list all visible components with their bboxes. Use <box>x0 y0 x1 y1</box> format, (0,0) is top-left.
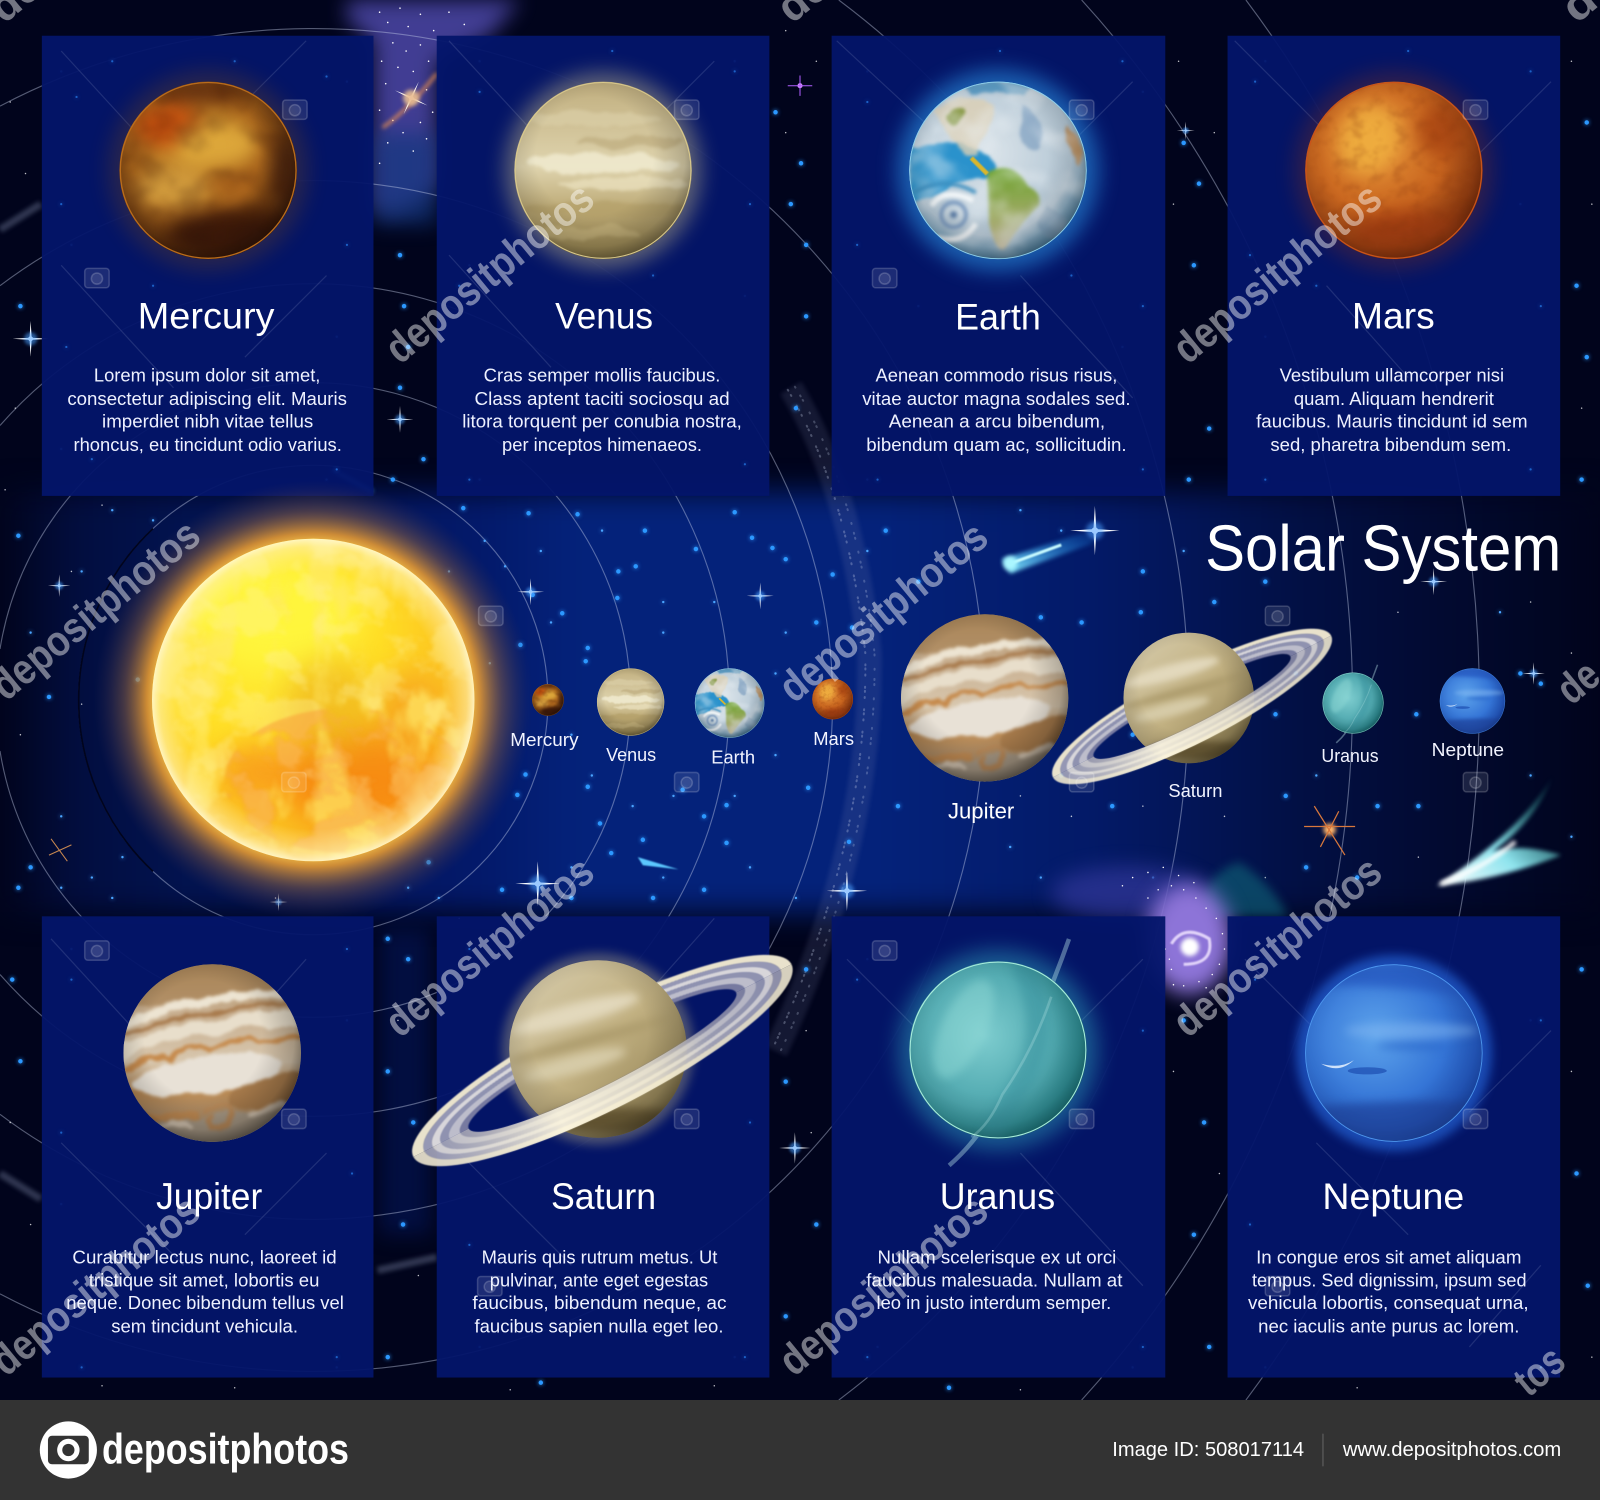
panel: Mercury background <box>42 36 373 496</box>
text: Earth description <box>862 365 1131 455</box>
text: Saturn description <box>472 1246 727 1337</box>
text: Uranus description: leo in justo interdum semper. <box>877 1292 1111 1313</box>
panel: Mars background <box>1228 36 1560 496</box>
text: Jupiter description: neque. Donec bibendum tellus vel <box>66 1292 344 1313</box>
text: Neptune description: tempus. Sed dignissim, ipsum sed <box>1252 1270 1527 1291</box>
heading: Uranus: Uranus <box>940 1176 1055 1217</box>
panel: Venus background <box>437 36 769 496</box>
watermark camera icons <box>85 100 1488 1296</box>
panel: Neptune background <box>1228 916 1560 1378</box>
text: Venus description: per inceptos himenaeos. <box>502 434 702 455</box>
text: Neptune description: In congue eros sit amet aliquam <box>1256 1246 1521 1267</box>
title: Solar System <box>1205 511 1561 584</box>
icon: small Uranus <box>1322 665 1384 743</box>
comets <box>332 469 1561 886</box>
text: Saturn description: faucibus sapien nulla eget leo. <box>474 1316 723 1337</box>
nebula: top <box>347 0 520 224</box>
watermarks: depositphotos <box>770 1186 997 1385</box>
planet glows <box>108 69 1493 1151</box>
text: Jupiter description: Curabitur lectus nunc, laoreet id <box>72 1246 337 1267</box>
text: Neptune description <box>1248 1246 1529 1337</box>
text: Jupiter description <box>66 1246 344 1337</box>
footer logo <box>40 1421 349 1479</box>
text: Jupiter description: tristique sit amet, lobortis eu <box>89 1270 319 1291</box>
watermarks: depositphotos <box>376 174 603 373</box>
text: Mercury description: consectetur adipiscing elit. Mauris <box>67 388 347 409</box>
panel: Uranus background <box>832 916 1165 1378</box>
text: Neptune description: nec iaculis ante purus ac lorem. <box>1258 1316 1519 1337</box>
label: Mars: Mars <box>813 728 854 749</box>
icon: small Mercury <box>532 683 564 716</box>
watermarks: depositphotos <box>1164 847 1391 1046</box>
text: Jupiter description: sem tincidunt vehicula. <box>111 1316 298 1337</box>
footer logo: depositphotos <box>102 1425 349 1473</box>
heading: Neptune: Neptune <box>1322 1176 1464 1217</box>
heading: Mars: Mars <box>1352 296 1435 337</box>
panel: Earth background <box>832 36 1165 496</box>
dark left orbit arcs <box>79 529 153 871</box>
text: Mars description <box>1256 365 1528 455</box>
text: Venus description: Class aptent taciti sociosqu ad <box>474 388 730 409</box>
watermarks: depositphotos <box>1164 174 1391 373</box>
dust band <box>0 204 875 1270</box>
icon: small Earth <box>695 668 764 738</box>
text: Venus description: litora torquent per conubia nostra, <box>462 411 742 432</box>
nebula: galaxy <box>1051 862 1288 994</box>
label: Earth: Earth <box>711 746 755 767</box>
icon: Uranus planet <box>909 939 1087 1165</box>
text: Earth description: bibendum quam ac, sollicitudin. <box>866 434 1127 455</box>
icon: Neptune planet <box>1305 964 1483 1142</box>
text: Saturn description: faucibus, bibendum neque, ac <box>472 1292 727 1313</box>
icon: small Mars <box>812 679 853 719</box>
icon: Sun <box>94 481 533 919</box>
heading: Earth: Earth <box>955 297 1041 338</box>
label: Neptune: Neptune <box>1432 739 1504 760</box>
icon: small Neptune <box>1440 668 1505 734</box>
text: Venus description: Cras semper mollis faucibus. <box>484 365 720 386</box>
footer image id: Image ID: 508017114 <box>1112 1439 1304 1461</box>
icon: small Saturn <box>1037 604 1347 809</box>
icon: Jupiter planet <box>96 952 330 1163</box>
footer url: www.depositphotos.com <box>1342 1439 1561 1461</box>
text: Mercury description: Lorem ipsum dolor sit amet, <box>94 365 320 386</box>
text: Saturn description: pulvinar, ante eget egestas <box>490 1270 708 1291</box>
watermarks: depositphotos <box>376 847 603 1046</box>
footer divider <box>1322 1434 1323 1466</box>
text: Earth description: vitae auctor magna sodales sed. <box>862 388 1131 409</box>
text: Mars description: Vestibulum ullamcorper nisi <box>1280 365 1504 386</box>
text: Earth description: Aenean commodo risus risus, <box>876 365 1117 386</box>
footer bar <box>0 1400 1600 1500</box>
label: Jupiter: Jupiter <box>948 798 1015 823</box>
watermarks: depositphotos <box>770 512 997 712</box>
text: Neptune description: vehicula lobortis, consequat urna, <box>1248 1292 1529 1313</box>
icon: Earth planet <box>909 82 1087 259</box>
panel: Saturn background <box>437 916 769 1378</box>
label: Mercury: Mercury <box>510 729 579 750</box>
text: Mercury description <box>67 365 347 455</box>
icon: small Jupiter <box>875 603 1096 802</box>
text: Mercury description: rhoncus, eu tincidunt odio varius. <box>73 434 342 455</box>
heading: Mercury: Mercury <box>138 296 275 337</box>
label: Saturn: Saturn <box>1168 780 1222 801</box>
text: Mercury description: imperdiet nibh vitae tellus <box>102 411 313 432</box>
text: Saturn description: Mauris quis rutrum metus. Ut <box>482 1246 717 1267</box>
icon: small Venus <box>597 668 666 736</box>
heading: Venus: Venus <box>555 296 653 337</box>
text: Mars description: quam. Aliquam hendrerit <box>1294 388 1494 409</box>
icon: Mars planet <box>1305 82 1483 259</box>
text: Uranus description <box>866 1246 1122 1313</box>
icon: Saturn planet <box>391 921 814 1200</box>
icon: Mercury planet <box>119 76 297 259</box>
text: Earth description: Aenean a arcu bibendum, <box>889 411 1105 432</box>
label: Venus: Venus <box>606 744 656 765</box>
text: Uranus description: faucibus malesuada. Nullam at <box>866 1270 1122 1291</box>
watermarks: tos <box>1504 1336 1574 1406</box>
icon: Venus planet <box>514 82 696 259</box>
star flares <box>13 76 1545 1164</box>
text: Mars description: faucibus. Mauris tincidunt id sem <box>1256 411 1528 432</box>
text: Uranus description: Nullam scelerisque ex ut orci <box>878 1246 1116 1267</box>
text: Mars description: sed, pharetra bibendum sem. <box>1270 434 1511 455</box>
heading: Jupiter: Jupiter <box>156 1176 262 1217</box>
label: Uranus: Uranus <box>1321 745 1379 766</box>
heading: Saturn: Saturn <box>551 1176 656 1217</box>
panel: Jupiter background <box>42 916 373 1378</box>
text: Venus description <box>462 365 742 455</box>
